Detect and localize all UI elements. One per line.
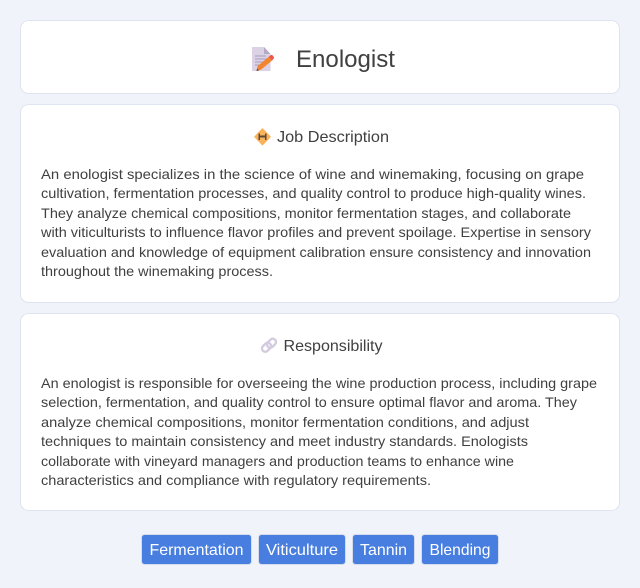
text: job description body: cultivation, fermentation processes, and quality control to produce high-quality wines.	[41, 185, 586, 201]
tag: Blending	[422, 534, 498, 564]
tag: Fermentation	[142, 534, 252, 564]
tag: Blending: Blending	[430, 542, 490, 559]
text: job description body: An enologist specializes in the science of wine and winemaking, focusing on grape	[41, 166, 584, 182]
tag row	[142, 534, 498, 564]
heading: Enologist: Enologist	[296, 46, 395, 73]
text: responsibility body: techniques to maintain consistency and meet industry standards. Enologists	[41, 433, 528, 449]
text: job description body: throughout the winemaking process.	[41, 263, 273, 279]
icon: memo with pencil	[252, 47, 274, 71]
text: job description body: They analyze chemical compositions, monitor fermentation stages, and collaborate	[41, 205, 571, 221]
tag: Tannin: Tannin	[360, 542, 407, 559]
panel: job description	[20, 104, 620, 302]
text: responsibility body: characteristics and compliance with regulatory requirements.	[41, 472, 431, 488]
text: responsibility body: collaborate with vineyard managers and production teams to enhance wine	[41, 453, 514, 469]
heading: job description: Job Description	[277, 129, 389, 146]
tag: Fermentation: Fermentation	[150, 542, 244, 559]
tag: Tannin	[352, 534, 414, 564]
text: responsibility body: analyze chemical compositions, monitor fermentation conditions, and adjust	[41, 414, 529, 430]
text: responsibility body: selection, fermentation, and quality control to ensure optimal flavor and aroma. They	[41, 394, 577, 410]
tag: Viticulture	[258, 534, 346, 564]
icon: chain link	[261, 337, 277, 353]
tag: Viticulture: Viticulture	[266, 542, 338, 559]
text: responsibility body	[41, 375, 597, 488]
text: job description body: evaluation and knowledge of equipment calibration ensure consistency and innovation	[41, 244, 591, 260]
text: job description body: with viticulturists to influence flavor profiles and prevent spoilage. Expertise in sensory	[40, 224, 591, 240]
heading: responsibility: Responsibility	[284, 338, 382, 355]
panel: responsibility	[20, 314, 620, 510]
panel: title	[20, 20, 620, 94]
icon: orange diamond	[255, 129, 270, 145]
text: responsibility body: An enologist is responsible for overseeing the wine production process, including grape	[41, 375, 597, 391]
text: job description body	[40, 166, 591, 279]
